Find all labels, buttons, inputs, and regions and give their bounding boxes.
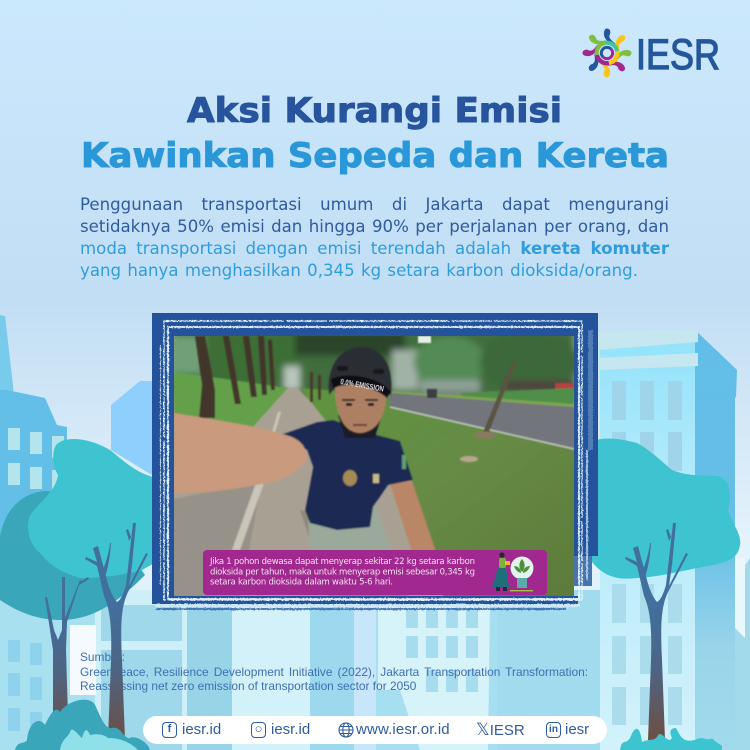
footer pill: social links <box>143 716 607 744</box>
callout text: dioksida per tahun, maka untuk menyerap emisi sebesar 0,345 kg <box>210 568 475 578</box>
icon: facebook <box>162 722 177 738</box>
building: right tower <box>598 329 750 750</box>
source note <box>80 650 588 693</box>
logo wordmark: IESR <box>636 31 720 79</box>
icon: light bulb with leaf <box>510 556 534 591</box>
hedge <box>460 388 574 405</box>
photo background: tree canopy <box>170 330 580 396</box>
intro paragraph: moda transportasi dengan emisi terendah adalah kereta komuter <box>80 239 669 258</box>
cyclist right arm <box>390 481 436 552</box>
X handle: 𝕏IESR <box>476 720 525 739</box>
bike path <box>254 388 378 510</box>
sky gap <box>418 336 431 343</box>
ground and lower buildings <box>0 590 750 750</box>
building: far left <box>0 315 67 540</box>
tree foliage: left back <box>0 491 145 620</box>
photo: cyclist selfie on bike path <box>170 330 580 600</box>
cyclist face <box>335 384 386 433</box>
title line 2: Kawinkan Sepeda dan Kereta <box>81 136 669 176</box>
cyclist arm <box>174 413 307 493</box>
logo <box>583 29 720 79</box>
source note: Greenpeace, Resilience Development Initiative (2022), Jakarta Transportation Transformation: <box>80 665 588 679</box>
cyclist shirt <box>280 420 413 530</box>
source note: Reassessing net zero emission of transportation sector for 2050 <box>80 679 416 693</box>
intro paragraph: yang hanya menghasilkan 0,345 kg setara karbon dioksida/orang. <box>80 261 638 280</box>
left grass <box>174 372 288 427</box>
road <box>388 393 574 448</box>
motorbike <box>427 389 437 398</box>
intro paragraph <box>80 195 669 280</box>
callout text: setara karbon dioksida dalam waktu 5-6 hari. <box>210 578 393 588</box>
instagram handle: iesr.id <box>271 721 310 738</box>
tree foliage: right <box>590 438 740 579</box>
source note: Sumber: <box>80 650 125 664</box>
helmet <box>329 347 391 395</box>
icon: globe <box>338 722 354 738</box>
tree trunk: left small <box>45 577 89 716</box>
website: www.iesr.or.id <box>356 721 450 738</box>
icon: woman with plant <box>492 552 510 591</box>
cyclist neck <box>338 415 382 438</box>
callout: tree absorption <box>203 550 547 595</box>
photo frame <box>152 313 598 610</box>
shrub: right <box>620 728 722 750</box>
helmet band lettering: 0.0% EMISSION <box>340 377 385 394</box>
title <box>81 91 669 176</box>
intro paragraph: Penggunaan transportasi umum di Jakarta dapat mengurangi <box>80 195 669 214</box>
trunks <box>195 336 215 418</box>
cyclist trousers <box>308 505 392 552</box>
building: pale blue behind frame <box>111 381 160 480</box>
intro paragraph: setidaknya 50% emisi dan hingga 90% per perjalanan per orang, dan <box>80 217 669 236</box>
facebook handle: iesr.id <box>182 721 221 738</box>
right grass <box>300 388 578 600</box>
icon: facebook: f <box>168 723 171 735</box>
icon: linkedin <box>546 722 561 738</box>
tree trunk: left main <box>85 523 148 740</box>
icon: instagram <box>251 722 266 738</box>
photo base <box>174 336 574 596</box>
linkedin handle: iesr <box>565 721 589 738</box>
tree foliage: left front <box>28 439 160 578</box>
title line 1: Aksi Kurangi Emisi <box>187 91 562 131</box>
shrub: left front <box>60 730 138 750</box>
callout text: Jika 1 pohon dewasa dapat menyerap sekitar 22 kg setara karbon <box>209 557 475 567</box>
shrub: left <box>15 700 150 750</box>
icon: instagram: ○ <box>255 721 262 736</box>
logo mark: swirl <box>583 29 631 77</box>
tree trunk: right <box>625 523 688 740</box>
icon: linkedin: in <box>549 724 558 735</box>
